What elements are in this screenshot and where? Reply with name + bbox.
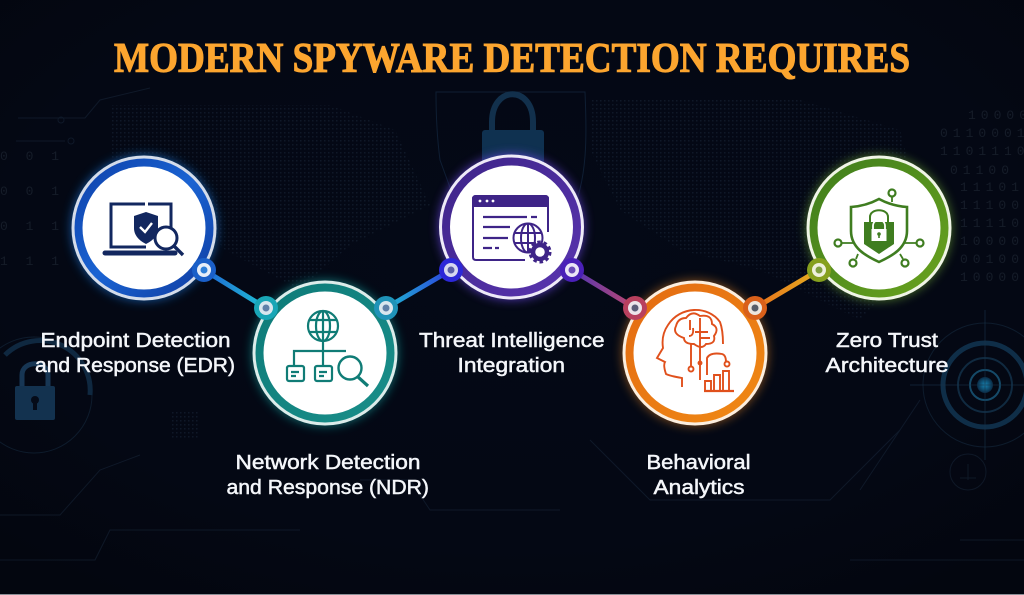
label: behavioral analytics: Analytics <box>654 477 744 499</box>
label: threat intelligence integration: Integration <box>458 355 565 377</box>
background radar target <box>910 310 1024 460</box>
background binary digits: 11101 <box>960 180 1024 195</box>
connector node 3 <box>374 296 398 320</box>
background binary digits: 11100 <box>960 198 1024 213</box>
title: MODERN SPYWARE DETECTION REQUIRES <box>114 35 910 82</box>
connector node 4 <box>439 258 463 282</box>
label: zero trust architecture: Zero Trust <box>836 330 938 352</box>
label: network detection and response: Network Detection <box>236 452 420 474</box>
label: zero trust architecture: Architecture <box>826 355 948 377</box>
label: zero trust architecture <box>826 330 948 377</box>
background binary digits: 0 0 1 <box>0 184 64 199</box>
label: endpoint detection and response: Endpoint Detection <box>40 330 231 352</box>
label: network detection and response <box>226 452 429 499</box>
circle: network detection <box>252 280 398 426</box>
connector: endpoint to network <box>204 270 266 308</box>
connector: network to threat intelligence <box>386 270 451 308</box>
label: behavioral analytics <box>646 452 750 499</box>
background binary digits: 10000 <box>960 234 1024 249</box>
connector node 1 <box>192 258 216 282</box>
label: endpoint detection and response: and Response (EDR) <box>35 355 235 377</box>
label: threat intelligence integration: Threat Intelligence <box>419 330 604 352</box>
connector: behavioral to zero trust <box>755 270 819 308</box>
icon: laptop shield magnifier <box>105 204 183 255</box>
label: endpoint detection and response <box>35 330 235 377</box>
background binary digits: 0 1 1 <box>0 219 64 234</box>
background padlock centre <box>482 94 544 170</box>
label: threat intelligence integration <box>419 330 604 377</box>
connector: threat intelligence to behavioral <box>572 270 635 308</box>
connector node 5 <box>560 258 584 282</box>
circle: zero trust <box>806 155 952 301</box>
circle: threat intelligence <box>438 154 584 300</box>
background binary digits: 01100 <box>950 163 1014 178</box>
icon: head brain chart <box>657 310 734 391</box>
connector node 7 <box>743 296 767 320</box>
connector node 2 <box>254 296 278 320</box>
background binary digits: 11110 <box>960 216 1024 231</box>
background binary digits: 10000 <box>960 270 1024 285</box>
icon: browser window globe gear <box>473 196 550 262</box>
background padlock left <box>0 337 92 453</box>
background binary digits: 0 0 1 <box>0 149 64 164</box>
circle: endpoint detection <box>71 155 217 301</box>
icon: network globe magnifier <box>287 311 368 386</box>
circle: behavioral analytics <box>622 280 768 426</box>
background binary digits: 1 1 1 <box>0 254 64 269</box>
background binary digits <box>0 108 1024 285</box>
label: behavioral analytics: Behavioral <box>646 452 750 474</box>
icon: shield padlock network <box>834 190 924 266</box>
label: network detection and response: and Response (NDR) <box>226 477 429 499</box>
connector node 8 <box>807 258 831 282</box>
connector node 6 <box>623 296 647 320</box>
background binary digits: 00100 <box>960 252 1024 267</box>
